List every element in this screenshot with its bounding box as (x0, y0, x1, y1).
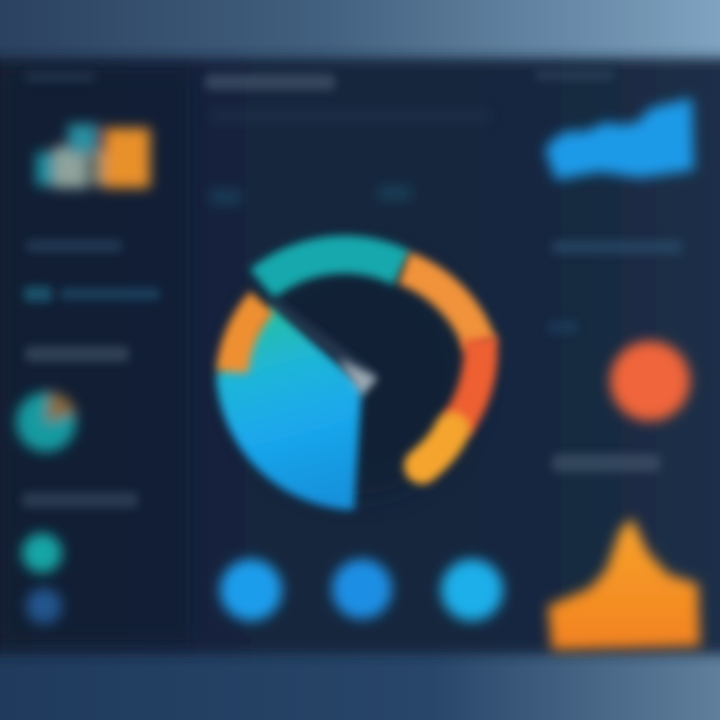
panel: centre (205, 74, 490, 510)
background band: top (0, 0, 720, 70)
area chart: blue (545, 98, 694, 180)
panel: right column (535, 70, 700, 650)
gauge arc: red (456, 338, 481, 426)
needle highlight (338, 358, 378, 396)
pie chart: blue and teal wedge (216, 305, 362, 510)
mountain chart: orange (548, 518, 700, 650)
right heading lower (552, 454, 660, 472)
panel: left column (0, 70, 190, 640)
left heading (25, 72, 95, 82)
centre text lines (210, 112, 490, 204)
icon: blue circle 3 (441, 559, 503, 621)
background band: bottom (0, 640, 720, 720)
donut chart: left (16, 392, 76, 452)
dot: teal (22, 533, 62, 573)
gauge arc: teal top (262, 255, 402, 284)
gauge arc: orange left (232, 302, 262, 372)
icon: blue circle 2 (332, 559, 392, 619)
heading: left lower (22, 492, 138, 508)
orange circle (610, 341, 690, 421)
icon: blue circle 1 (220, 559, 282, 621)
gauge arc: orange right (404, 268, 480, 345)
bar chart: top left (36, 124, 150, 188)
gauge shadow (235, 255, 475, 495)
dot: blue (26, 588, 62, 624)
text lines: left middle (24, 240, 160, 302)
centre heading (205, 74, 335, 90)
left column background (0, 70, 190, 640)
heading: left small chart (25, 346, 129, 362)
right heading (535, 70, 615, 80)
text lines: right (548, 240, 682, 334)
gauge needle (272, 296, 376, 384)
gauge arc: yellow end (422, 430, 452, 466)
